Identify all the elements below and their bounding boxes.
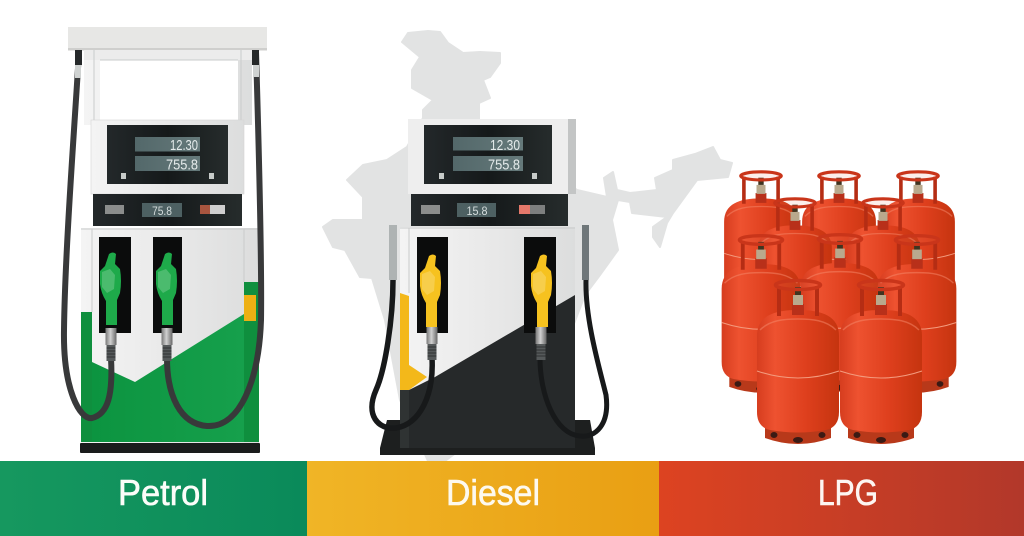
green livery bbox=[92, 314, 244, 442]
LPG cylinder group bbox=[722, 172, 956, 444]
display screen bbox=[424, 125, 552, 184]
second row cylinder 2 bbox=[846, 199, 920, 346]
left collar bbox=[106, 328, 116, 361]
petrol label: Petrol bbox=[118, 472, 208, 513]
left hose bbox=[64, 52, 111, 418]
left green nozzle bbox=[100, 252, 121, 325]
left collar bbox=[426, 327, 438, 360]
price readout: 12.30 bbox=[490, 137, 520, 154]
third row cylinder 1 bbox=[722, 236, 800, 393]
display housing bbox=[408, 119, 576, 194]
right collar bbox=[536, 327, 546, 360]
pump base bbox=[80, 443, 260, 453]
petrol pump bbox=[64, 27, 267, 453]
right collar bbox=[162, 328, 172, 361]
front cylinder 1 bbox=[757, 280, 839, 444]
front cylinder 2 bbox=[840, 280, 922, 444]
control strip bbox=[411, 194, 568, 226]
back row cylinder 1 bbox=[724, 172, 798, 319]
yellow livery bbox=[400, 293, 427, 390]
second row cylinder 1 bbox=[758, 199, 832, 346]
right hose bbox=[167, 52, 261, 426]
platform bbox=[380, 420, 595, 455]
third row cylinder 3 bbox=[878, 236, 956, 393]
third row cylinder 2 bbox=[801, 235, 879, 392]
nozzle holders bbox=[417, 237, 556, 333]
canopy bbox=[68, 27, 267, 50]
background map of India bbox=[323, 31, 732, 461]
label band: diesel bbox=[307, 461, 659, 536]
label band: petrol bbox=[0, 461, 307, 536]
back row cylinder 3 bbox=[881, 172, 955, 319]
diesel label: Diesel bbox=[446, 472, 540, 513]
control strip bbox=[93, 194, 242, 226]
canopy posts bbox=[84, 50, 252, 125]
left yellow nozzle bbox=[420, 254, 441, 327]
right yellow nozzle bbox=[531, 254, 552, 327]
label band: LPG bbox=[659, 461, 1024, 536]
volume readout: 755.8 bbox=[488, 156, 520, 174]
price readout: 12.30 bbox=[170, 137, 198, 154]
volume readout: 755.8 bbox=[166, 156, 198, 174]
right hose bbox=[540, 280, 607, 436]
display screen bbox=[107, 125, 228, 184]
strip readout: 15.8 bbox=[466, 204, 488, 218]
right green nozzle bbox=[156, 252, 177, 325]
diesel pump bbox=[372, 119, 607, 455]
nozzle holders bbox=[99, 237, 182, 333]
right hose tube bbox=[582, 225, 589, 280]
strip readout: 75.8 bbox=[152, 204, 172, 218]
display housing bbox=[91, 120, 244, 194]
back row cylinder 2 bbox=[802, 172, 876, 319]
pump body bbox=[400, 227, 575, 448]
LPG label: LPG bbox=[818, 472, 878, 513]
pump body bbox=[81, 228, 259, 444]
black livery bbox=[409, 295, 575, 448]
left hose bbox=[372, 280, 432, 428]
left hose tube bbox=[389, 225, 397, 280]
